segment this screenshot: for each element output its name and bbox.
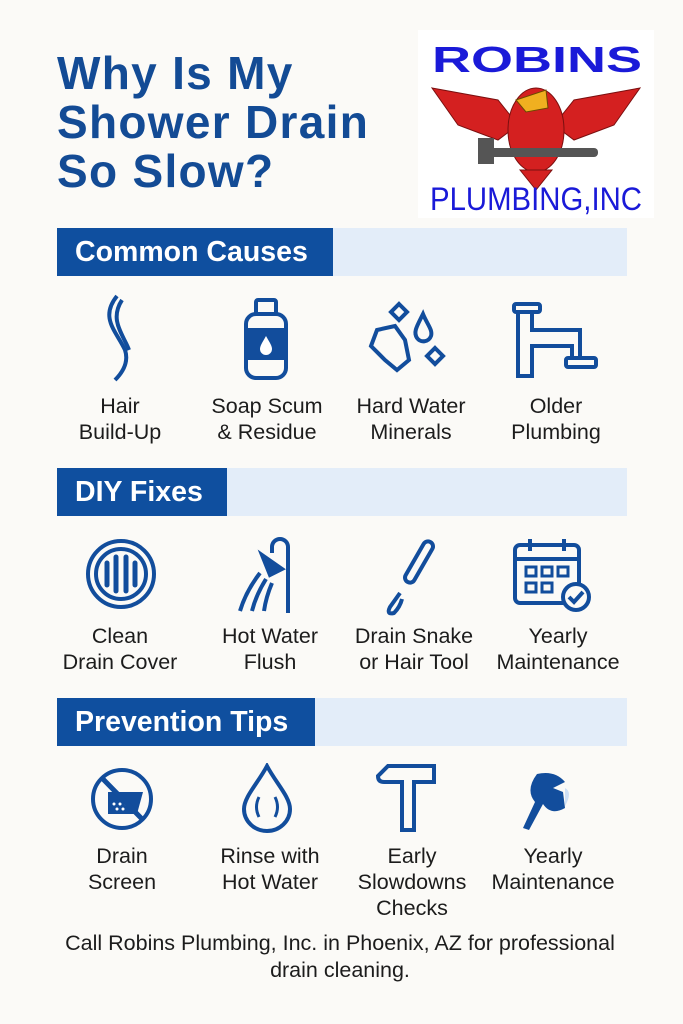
text: Hot Water <box>222 624 318 648</box>
text: Minerals <box>370 420 452 444</box>
icon: hot water flush <box>238 537 290 613</box>
labels: prevention: Screen <box>88 870 156 894</box>
logo <box>418 30 654 218</box>
labels: causes <box>79 394 161 444</box>
icon: water drop <box>242 763 292 833</box>
text: or Hair Tool <box>359 650 469 674</box>
text: Checks <box>376 896 448 920</box>
text: Soap Scum <box>211 394 323 418</box>
footer: drain cleaning. <box>270 958 410 982</box>
text: Flush <box>244 650 296 674</box>
section: common causes heading <box>57 228 627 276</box>
text: Yearly <box>524 844 582 868</box>
icon: hard water minerals <box>368 301 446 373</box>
icon: drain snake <box>386 539 435 616</box>
text: Slowdowns <box>358 870 466 894</box>
icon: drain cover <box>86 539 156 609</box>
text: Drain Snake <box>355 624 473 648</box>
section: prevention tips heading: Prevention Tips <box>75 706 288 738</box>
labels: fixes: Drain Cover <box>63 650 177 674</box>
icon: soap bottle <box>244 298 288 380</box>
text: Rinse with <box>220 844 320 868</box>
text: Early <box>388 844 436 868</box>
icon: hair <box>107 294 131 382</box>
section: prevention tips heading <box>57 698 627 746</box>
labels: fixes <box>63 624 177 674</box>
footer <box>65 931 615 982</box>
section: DIY fixes heading <box>57 468 627 516</box>
title <box>57 47 369 197</box>
text: Maintenance <box>496 650 620 674</box>
labels: prevention: Drain <box>96 844 148 868</box>
labels: causes: Hair <box>100 394 140 418</box>
text: & Residue <box>217 420 317 444</box>
section: common causes heading: Common Causes <box>75 236 308 268</box>
labels: prevention <box>88 844 156 894</box>
icon: calendar <box>513 539 591 612</box>
text: Plumbing <box>511 420 601 444</box>
labels: causes: Build-Up <box>79 420 161 444</box>
icon: older plumbing <box>512 302 598 378</box>
title: So Slow? <box>57 145 274 197</box>
labels: fixes: Clean <box>92 624 148 648</box>
title: Shower Drain <box>57 96 369 148</box>
icon: wrench <box>523 773 569 830</box>
icon: drain screen <box>91 768 153 830</box>
title: Why Is My <box>57 47 294 99</box>
section: DIY fixes heading: DIY Fixes <box>75 476 203 508</box>
text: Hot Water <box>222 870 318 894</box>
text: Hard Water <box>356 394 466 418</box>
text: Maintenance <box>491 870 615 894</box>
text: Older <box>530 394 582 418</box>
text: Yearly <box>529 624 587 648</box>
logo: ROBINS <box>432 39 642 80</box>
footer: Call Robins Plumbing, Inc. in Phoenix, AZ for professional <box>65 931 615 955</box>
icon: hammer <box>376 764 436 832</box>
